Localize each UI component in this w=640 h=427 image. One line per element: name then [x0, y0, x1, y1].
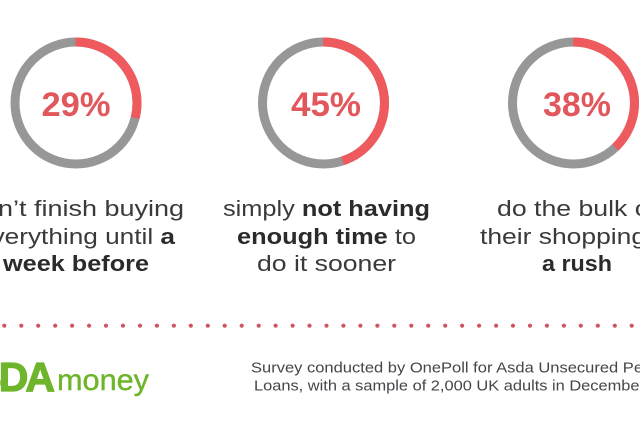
- donut chart: 29%: [15, 42, 137, 164]
- panel: 45% stat: [223, 42, 430, 276]
- value: 45%: 45%: [291, 86, 361, 124]
- panel: 29% stat: [0, 42, 184, 276]
- value: 29%: 29%: [42, 86, 110, 124]
- logo: ASDA money: money: [57, 364, 149, 397]
- donut chart: 45%: [262, 42, 384, 164]
- footnote: survey source: [251, 360, 640, 394]
- footnote: survey source: Loans, with a sample of 2,000 UK adults in December 2018: [254, 378, 640, 394]
- text block: 45% description: do it sooner: [257, 251, 397, 276]
- panel: 38% stat: [480, 42, 640, 276]
- text block: 38% description: do the bulk of: [497, 196, 640, 221]
- text block: 45% description: enough time to: [237, 224, 416, 249]
- text block: 29% description: week before: [2, 251, 149, 276]
- text block: 38% description: a rush: [542, 251, 612, 276]
- text block: 45% description: [223, 196, 430, 276]
- footnote: survey source: Survey conducted by OnePoll for Asda Unsecured Personal: [251, 360, 640, 376]
- logo: ASDA money: [0, 354, 149, 400]
- text block: 38% description: [480, 196, 640, 276]
- text block: 29% description: [0, 196, 184, 276]
- donut chart: 38%: [512, 42, 634, 164]
- text block: 45% description: simply not having: [223, 196, 430, 221]
- value: 38%: 38%: [543, 86, 611, 124]
